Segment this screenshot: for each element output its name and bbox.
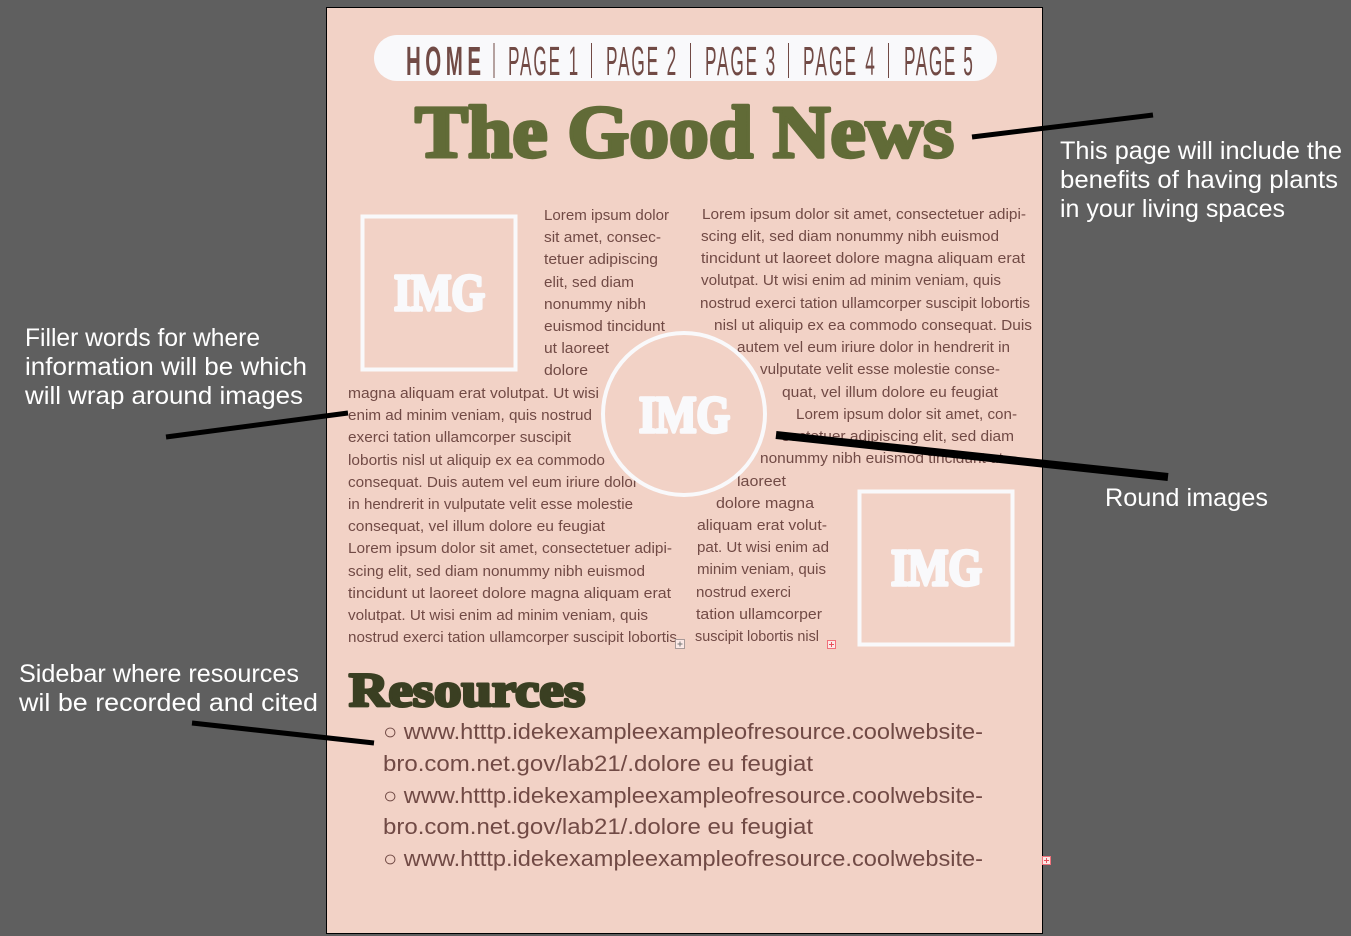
- text block: left column: exerci tation ullamcorper suscipit: [348, 429, 572, 446]
- text block: left column: scing elit, sed diam nonummy nibh euismod: [348, 563, 645, 580]
- text block: right column: laoreet: [737, 473, 787, 490]
- callout: page benefits: benefits of having plants: [1060, 166, 1338, 194]
- image placeholder: lower right square: IMG: [891, 540, 982, 597]
- text block: left column: ut laoreet: [544, 340, 610, 357]
- text block: left column: volutpat. Ut wisi enim ad minim veniam, quis: [348, 607, 648, 624]
- text block: left column: Lorem ipsum dolor: [544, 207, 669, 224]
- text block: left column: elit, sed diam: [544, 274, 634, 291]
- text block: right column: [695, 206, 1032, 645]
- text block: left column: enim ad minim veniam, quis nostrud: [348, 407, 592, 424]
- text block: right column: nostrud exerci: [696, 584, 791, 601]
- callout: filler words: information will be which: [25, 353, 307, 381]
- text block: left column: nostrud exerci tation ullamcorper suscipit lobortis: [348, 629, 677, 646]
- callout: sidebar: [18, 660, 318, 717]
- text block: right column: tation ullamcorper: [696, 606, 822, 623]
- text block: left column: Lorem ipsum dolor sit amet, consectetuer adipi-: [348, 540, 672, 557]
- text block: right column: tincidunt ut laoreet dolore magna aliquam erat: [701, 250, 1026, 267]
- text block: resource list: bro.com.net.gov/lab21/.dolore eu feugiat: [383, 751, 813, 776]
- text block: left column: [348, 207, 677, 646]
- heading: resources: Resources: [349, 664, 585, 717]
- navigation bar: PAGE 3: [705, 38, 775, 84]
- image placeholder: lower right square: [860, 492, 1012, 644]
- text block: right column: Lorem ipsum dolor sit amet, con-: [796, 406, 1017, 423]
- callout: page benefits: [1060, 137, 1342, 223]
- navigation bar: PAGE 2: [606, 38, 676, 84]
- text block: resource list: ○ www.htttp.idekexampleexampleofresource.coolwebsite-: [383, 846, 983, 871]
- callout: filler words: Filler words for where: [25, 324, 260, 352]
- text block: left column: euismod tincidunt: [544, 318, 666, 335]
- callout: round images: Round images: [1105, 484, 1268, 512]
- text block: right column: pat. Ut wisi enim ad: [697, 539, 829, 556]
- callout: sidebar: Sidebar where resources: [19, 660, 299, 688]
- icon: overflow marker right column: [828, 640, 836, 648]
- text block: right column: dolore magna: [716, 495, 815, 512]
- image placeholder: center round: [603, 333, 765, 495]
- navigation bar: PAGE 5: [904, 38, 973, 84]
- navigation bar: HOME: [406, 38, 481, 84]
- text block: left column: consequat, vel illum dolore eu feugiat: [348, 518, 606, 535]
- text block: resource list: ○ www.htttp.idekexampleexampleofresource.coolwebsite-: [383, 719, 983, 744]
- arrow: title annotation: [972, 115, 1153, 137]
- text block: left column: sit amet, consec-: [544, 229, 661, 246]
- panel: page: [326, 8, 1042, 934]
- text block: left column: magna aliquam erat volutpat. Ut wisi: [348, 385, 599, 402]
- text block: resource list: [383, 719, 983, 871]
- text block: right column: autem vel eum iriure dolor in hendrerit in: [737, 339, 1010, 356]
- text block: right column: Lorem ipsum dolor sit amet, consectetuer adipi-: [702, 206, 1026, 223]
- text block: right column: vulputate velit esse molestie conse-: [760, 361, 1000, 378]
- text block: left column: consequat. Duis autem vel eum iriure dolor: [348, 474, 638, 491]
- arrow: sidebar annotation: [192, 723, 374, 743]
- image placeholder: top left square: [362, 216, 516, 370]
- callout: filler words: will wrap around images: [24, 382, 303, 410]
- text block: right column: sectetuer adipiscing elit, sed diam: [782, 428, 1014, 445]
- icon: overflow marker left column: [676, 640, 684, 648]
- text block: right column: nonummy nibh euismod tincidunt ut: [760, 450, 1004, 467]
- text block: left column: dolore: [544, 362, 588, 379]
- navigation bar: PAGE 1: [508, 38, 578, 84]
- text block: left column: lobortis nisl ut aliquip ex ea commodo: [348, 452, 605, 469]
- callout: filler words: [24, 324, 307, 410]
- text block: right column: quat, vel illum dolore eu feugiat: [782, 384, 999, 401]
- title: The Good News: [415, 92, 954, 174]
- text block: resource list: ○ www.htttp.idekexampleexampleofresource.coolwebsite-: [383, 783, 983, 808]
- text block: left column: nonummy nibh: [544, 296, 646, 313]
- text block: right column: volutpat. Ut wisi enim ad minim veniam, quis: [701, 272, 1001, 289]
- text block: left column: tincidunt ut laoreet dolore magna aliquam erat: [348, 585, 672, 602]
- text block: right column: aliquam erat volut-: [697, 517, 827, 534]
- image placeholder: top left square: IMG: [394, 265, 485, 322]
- text block: resource list: bro.com.net.gov/lab21/.dolore eu feugiat: [383, 814, 813, 839]
- text block: right column: suscipit lobortis nisl: [695, 628, 819, 645]
- icon: overflow marker resources: [1042, 856, 1050, 864]
- callout: page benefits: in your living spaces: [1060, 195, 1285, 223]
- arrow: round images annotation: [776, 435, 1168, 477]
- text block: right column: nostrud exerci tation ullamcorper suscipit lobortis: [700, 295, 1030, 312]
- navigation bar: [374, 35, 997, 84]
- text block: right column: minim veniam, quis: [697, 561, 826, 578]
- text block: left column: in hendrerit in vulputate velit esse molestie: [348, 496, 633, 513]
- image placeholder: center round: IMG: [639, 387, 730, 444]
- text block: right column: nisl ut aliquip ex ea commodo consequat. Duis: [714, 317, 1032, 334]
- arrow: filler words annotation: [166, 413, 348, 437]
- text block: left column: tetuer adipiscing: [544, 251, 658, 268]
- callout: sidebar: wil be recorded and cited: [18, 689, 318, 717]
- navigation bar: PAGE 4: [803, 38, 875, 84]
- text block: right column: scing elit, sed diam nonummy nibh euismod: [701, 228, 999, 245]
- callout: page benefits: This page will include the: [1060, 137, 1342, 165]
